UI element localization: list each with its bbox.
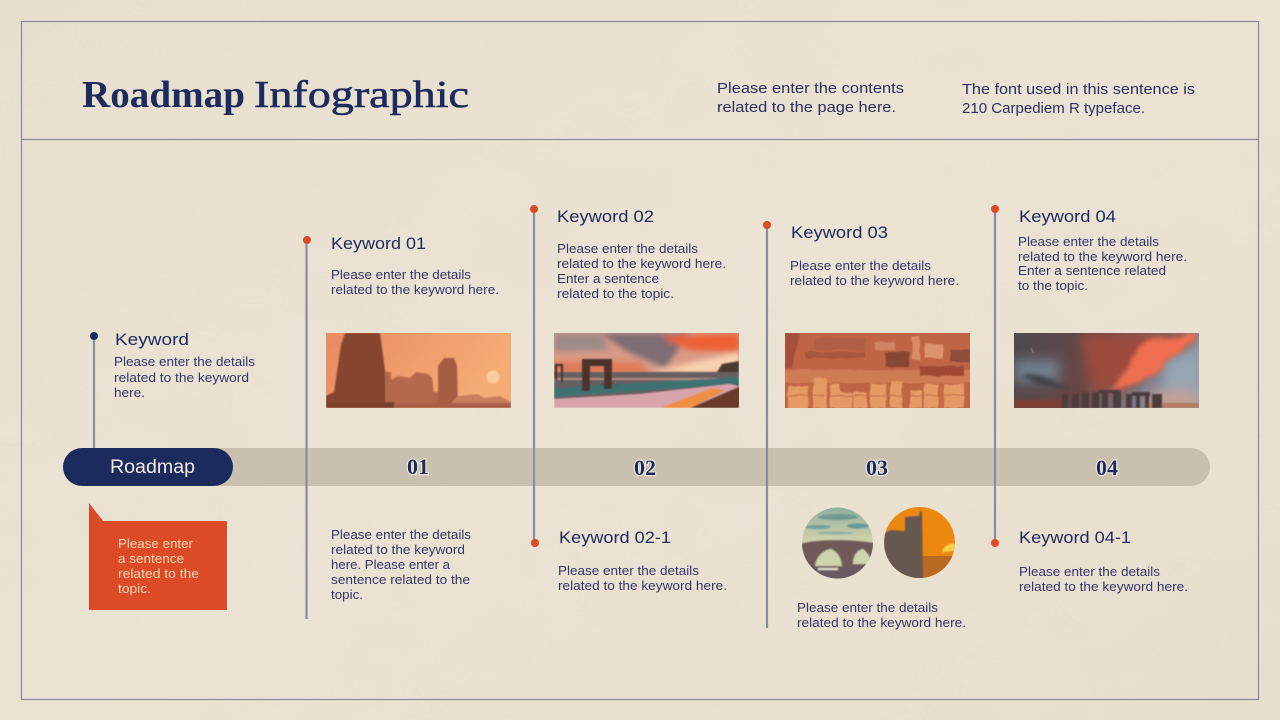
- timeline stem: 01: [303, 236, 311, 619]
- header text: page contents: [717, 81, 904, 116]
- keyword 04 block: Enter a sentence related: [1018, 264, 1166, 278]
- timeline stem: 04: [991, 205, 999, 547]
- image: stone arch bridge circle: [800, 507, 875, 580]
- text under 01: [331, 528, 471, 602]
- step number 04: 04: [1096, 455, 1118, 480]
- step number 01: 01: [407, 454, 429, 479]
- keyword 04 block: related to the keyword here.: [1018, 250, 1187, 264]
- keyword 04-1 block: related to the keyword here.: [1019, 580, 1188, 594]
- keyword 01 block: Please enter the details: [331, 268, 471, 282]
- keyword 01 block: [331, 234, 499, 297]
- roadmap pill: [63, 448, 233, 486]
- header text: typeface note: The font used in this sentence is: [962, 82, 1195, 98]
- timeline stem: keyword: [90, 332, 98, 449]
- keyword 02 block: related to the keyword here.: [557, 257, 726, 271]
- image: city skyline at sunset: [326, 333, 511, 408]
- text under 01: sentence related to the: [331, 573, 470, 587]
- keyword 02 block: Please enter the details: [557, 242, 698, 256]
- orange callout: Please enter: [118, 537, 193, 551]
- keyword 04-1 block: Keyword 04-1: [1019, 528, 1131, 547]
- image: tower at orange sunset circle: [884, 507, 956, 579]
- image: seaside arch at sunset: [554, 333, 745, 408]
- keyword 02-1 block: related to the keyword here.: [558, 579, 727, 593]
- step number 03: 03: [866, 455, 888, 480]
- orange callout: related to the: [118, 567, 199, 581]
- text under 03: [797, 601, 966, 630]
- orange callout: a sentence: [118, 552, 184, 566]
- keyword 04-1 block: Please enter the details: [1019, 565, 1160, 579]
- keyword block: related to the keyword: [114, 371, 249, 385]
- keyword 03 block: related to the keyword here.: [790, 274, 959, 288]
- orange callout: [89, 503, 227, 610]
- title: Infographic: [254, 74, 469, 116]
- keyword 02 block: Keyword 02: [557, 207, 654, 226]
- text under 01: related to the keyword: [331, 543, 465, 557]
- roadmap track bar: [63, 448, 1210, 486]
- keyword 02-1 block: [558, 528, 727, 593]
- header text: page contents: related to the page here.: [717, 100, 896, 116]
- keyword 04-1 block: [1019, 528, 1188, 594]
- text under 03: related to the keyword here.: [797, 616, 966, 630]
- keyword 04 block: Keyword 04: [1019, 207, 1116, 226]
- keyword 02-1 block: Please enter the details: [558, 564, 699, 578]
- header text: typeface note: [962, 82, 1195, 117]
- keyword 02 block: Enter a sentence: [557, 272, 659, 286]
- keyword 03 block: Keyword 03: [791, 223, 888, 242]
- keyword block: here.: [114, 386, 145, 400]
- keyword block: Keyword: [115, 330, 189, 349]
- timeline stem: 02: [530, 205, 539, 547]
- timeline stem: 03: [763, 221, 771, 628]
- image: stonehenge under red sky: [1014, 333, 1199, 408]
- keyword 01 block: Keyword 01: [331, 234, 426, 253]
- roadmap pill: Roadmap: [110, 457, 195, 478]
- text under 01: here. Please enter a: [331, 558, 450, 572]
- text under 01: Please enter the details: [331, 528, 471, 542]
- keyword 02 block: [557, 207, 726, 301]
- step number 02: 02: [634, 455, 656, 480]
- title: [82, 74, 469, 116]
- header text: page contents: Please enter the contents: [717, 81, 904, 97]
- header text: typeface note: 210 Carpediem R typeface.: [962, 101, 1145, 117]
- keyword 02-1 block: Keyword 02-1: [559, 528, 671, 547]
- keyword 04 block: to the topic.: [1018, 279, 1088, 293]
- keyword 02 block: related to the topic.: [557, 287, 674, 301]
- image: carved rock city: [780, 333, 975, 410]
- title: Roadmap: [82, 74, 245, 116]
- keyword block: [114, 330, 255, 400]
- keyword 01 block: related to the keyword here.: [331, 283, 499, 297]
- keyword block: Please enter the details: [114, 355, 255, 369]
- text under 01: topic.: [331, 588, 363, 602]
- keyword 04 block: [1018, 207, 1187, 293]
- orange callout: topic.: [118, 582, 151, 596]
- text under 03: Please enter the details: [797, 601, 938, 615]
- keyword 03 block: Please enter the details: [790, 259, 931, 273]
- keyword 04 block: Please enter the details: [1018, 235, 1159, 249]
- keyword 03 block: [790, 223, 959, 288]
